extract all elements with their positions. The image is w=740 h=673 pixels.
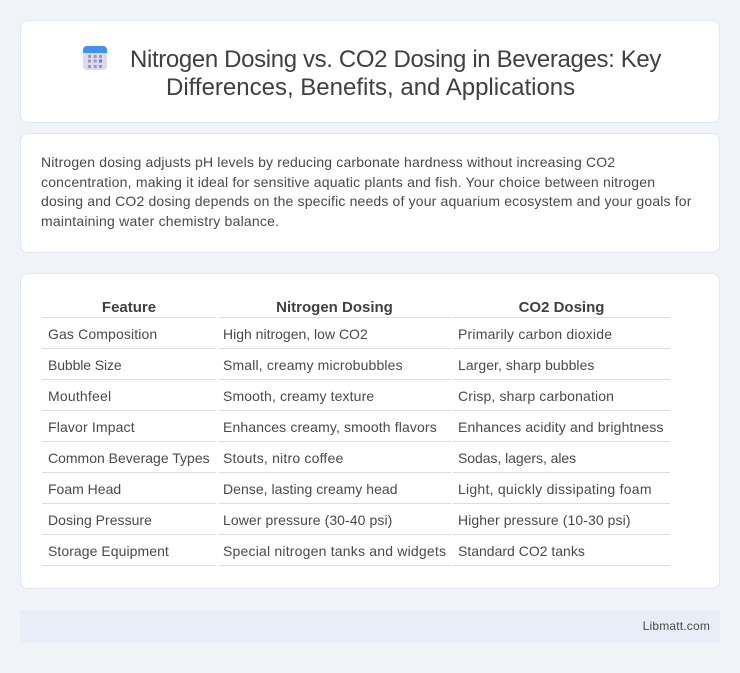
- description text: maintaining water chemistry balance.: [41, 213, 279, 229]
- table header: Feature: [102, 299, 156, 316]
- row: foam head: Dense, lasting creamy head: [223, 481, 398, 497]
- icon: calendar: [83, 46, 107, 70]
- row: common beverage types: Common Beverage Types: [48, 450, 210, 466]
- row: bubble size: Larger, sharp bubbles: [458, 357, 594, 373]
- row: common beverage types: Stouts, nitro coffee: [223, 450, 343, 466]
- row: foam head: [42, 481, 670, 504]
- panel: comparison table: [20, 273, 720, 589]
- table header: Nitrogen Dosing: [276, 299, 393, 316]
- row: storage equipment: Special nitrogen tanks and widgets: [223, 543, 446, 559]
- row: common beverage types: Sodas, lagers, ales: [458, 450, 576, 466]
- row: foam head: Light, quickly dissipating foam: [458, 481, 652, 497]
- row: gas composition: Gas Composition: [48, 326, 157, 342]
- table header: [42, 299, 670, 318]
- title line 1: Nitrogen Dosing vs. CO2 Dosing in Beverages: Key: [130, 46, 661, 73]
- row: flavor impact: Enhances acidity and brightness: [458, 419, 664, 435]
- row: flavor impact: Enhances creamy, smooth flavors: [223, 419, 437, 435]
- description text: [41, 154, 692, 229]
- row: common beverage types: [42, 450, 670, 473]
- row: flavor impact: [42, 419, 670, 442]
- row: bubble size: [42, 357, 670, 380]
- row: dosing pressure: [42, 512, 670, 535]
- row: foam head: Foam Head: [48, 481, 121, 497]
- row: storage equipment: [42, 543, 670, 566]
- row: dosing pressure: Higher pressure (10-30 psi): [458, 512, 631, 528]
- row: storage equipment: Standard CO2 tanks: [458, 543, 585, 559]
- row: gas composition: Primarily carbon dioxide: [458, 326, 612, 342]
- footer bar: [20, 610, 720, 643]
- row: bubble size: Bubble Size: [48, 357, 122, 373]
- description text: Nitrogen dosing adjusts pH levels by reducing carbonate hardness without increasing CO2: [41, 154, 615, 170]
- row: storage equipment: Storage Equipment: [48, 543, 169, 559]
- row: mouthfeel: Smooth, creamy texture: [223, 388, 374, 404]
- description text: dosing and CO2 dosing depends on the specific needs of your aquarium ecosystem and your goals for: [41, 193, 692, 209]
- row: mouthfeel: Crisp, sharp carbonation: [458, 388, 614, 404]
- row: flavor impact: Flavor Impact: [48, 419, 135, 435]
- panel: title: [20, 20, 720, 123]
- row: bubble size: Small, creamy microbubbles: [223, 357, 403, 373]
- row: mouthfeel: Mouthfeel: [48, 388, 111, 404]
- table: [42, 299, 670, 566]
- row: mouthfeel: [42, 388, 670, 411]
- row: dosing pressure: Dosing Pressure: [48, 512, 152, 528]
- row: gas composition: High nitrogen, low CO2: [223, 326, 368, 342]
- title line 2: Differences, Benefits, and Applications: [166, 74, 575, 101]
- panel: description: [20, 133, 720, 253]
- row: dosing pressure: Lower pressure (30-40 psi): [223, 512, 392, 528]
- table header: CO2 Dosing: [519, 299, 604, 316]
- description text: concentration, making it ideal for sensitive aquatic plants and fish. Your choice between nitrogen: [41, 174, 655, 190]
- row: gas composition: [42, 326, 670, 349]
- footer credit: Libmatt.com: [643, 619, 710, 633]
